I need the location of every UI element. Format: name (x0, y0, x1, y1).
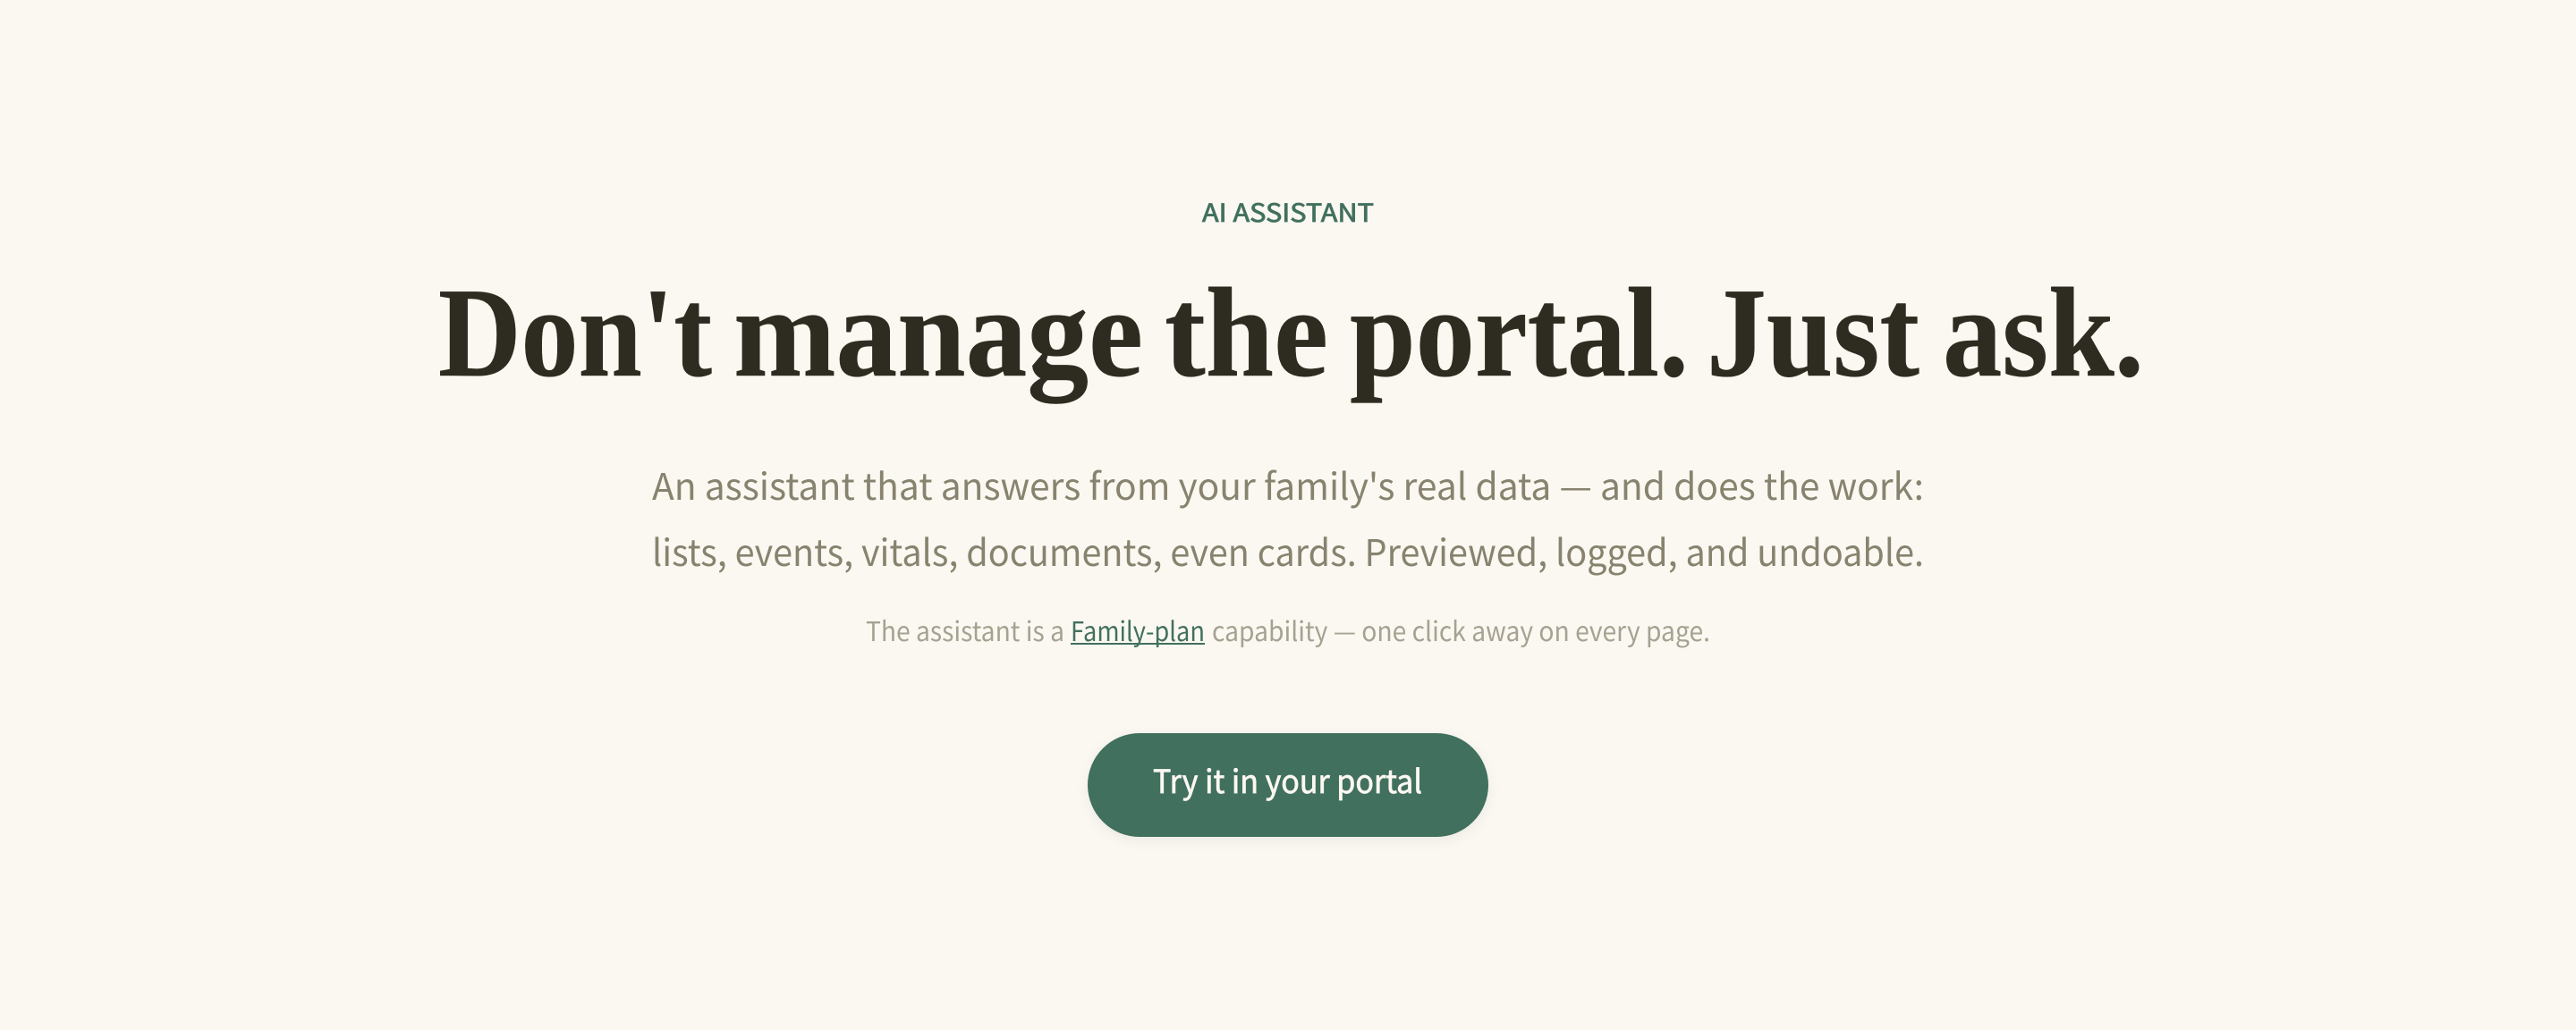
title: Just (1707, 262, 1919, 403)
title (438, 262, 2144, 404)
title: the (1165, 262, 1328, 403)
button: try it in your portal: Try it in your portal (1153, 756, 1422, 803)
plan note (866, 610, 1710, 649)
title: portal. (1350, 262, 1689, 403)
button: try it in your portal (1088, 733, 1488, 837)
title: Don't (438, 262, 712, 403)
plan note: The assistant is a (866, 610, 1064, 649)
eyebrow label: AI ASSISTANT (1202, 194, 1374, 230)
link: Family-plan: Family-plan (1071, 610, 1205, 649)
plan note: capability — one click away on every page. (1212, 610, 1710, 649)
title: ask. (1943, 262, 2144, 403)
subtitle text: lists, events, vitals, documents, even cards. Previewed, logged, and undoable. (652, 523, 1924, 577)
subtitle text (652, 457, 1924, 577)
subtitle text: An assistant that answers from your family's real data — and does the work: (652, 457, 1924, 511)
title: manage (733, 262, 1143, 404)
